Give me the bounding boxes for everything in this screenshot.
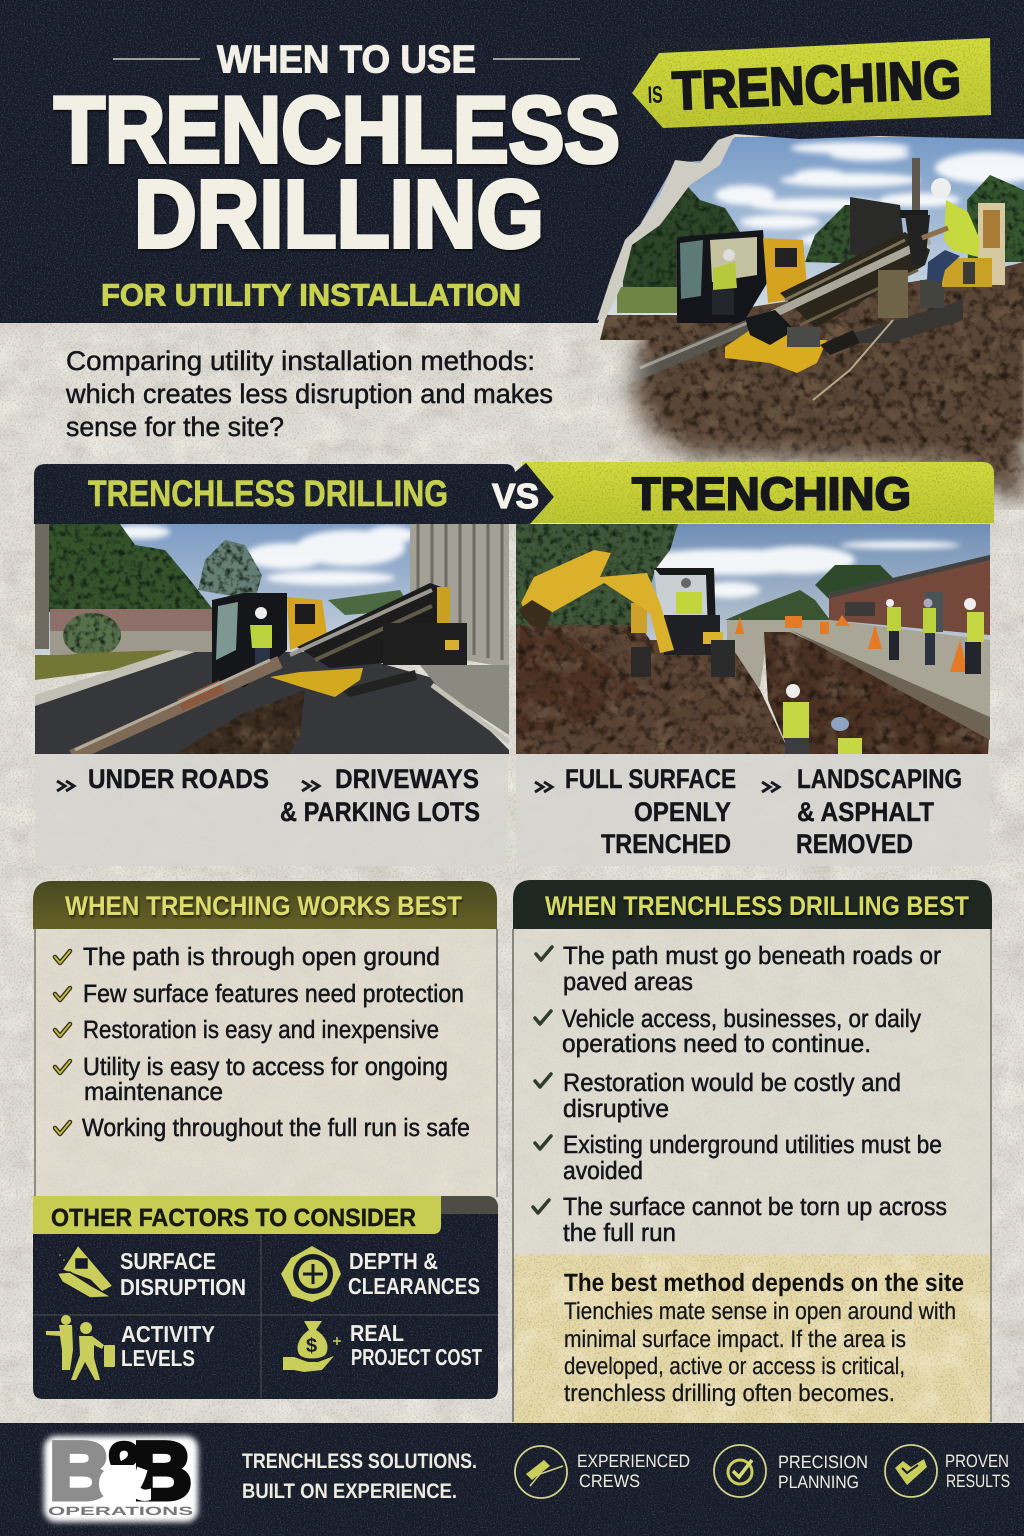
panel: other factors to consider: OTHER FACTORS TO CONSIDER: [51, 1204, 416, 1232]
callout: best method: trenchless drilling often becomes.: [564, 1380, 895, 1407]
intro text: sense for the site?: [66, 412, 284, 442]
callout: best method: developed, active or access is critical,: [564, 1353, 905, 1380]
badge: proven results: PROVEN: [945, 1451, 1009, 1471]
rods: [290, 583, 467, 697]
icon: depth and clearances: [281, 1246, 341, 1302]
icon: real project cost: $: [306, 1335, 317, 1357]
intro text: which creates less disruption and makes: [65, 379, 553, 409]
logo: [44, 1426, 198, 1522]
panel: when trenchless drilling best: WHEN TRENCHLESS DRILLING BEST: [545, 891, 969, 921]
panel: other factors to consider: [33, 1196, 498, 1399]
panel: when trenching works best: WHEN TRENCHING WORKS BEST: [65, 891, 462, 921]
cones: [735, 615, 968, 672]
panel: other factors to consider: DEPTH &: [349, 1248, 438, 1274]
comparison banner: VS: [492, 477, 539, 516]
rig rear housing: [850, 197, 905, 255]
excavator: [518, 550, 735, 677]
panel: when trenching works best: Working throughout the full run is safe: [82, 1114, 470, 1142]
yellow drill head: [725, 310, 827, 373]
comparison banner: TRENCHING: [632, 468, 911, 520]
heading tag: [33, 1196, 441, 1234]
panel: when trenching works best: Few surface features need protection: [83, 980, 464, 1008]
panel: when trenchless drilling best: The path must go beneath roads or: [563, 942, 941, 970]
panel: when trenching works best: [33, 881, 497, 1200]
rig cab: [212, 593, 327, 687]
panel: when trenchless drilling best: The surface cannot be torn up across: [563, 1193, 947, 1221]
title block: DRILLING: [134, 161, 544, 268]
panel: when trenchless drilling best: disruptive: [563, 1095, 669, 1123]
panel: when trenchless drilling best: paved areas: [563, 968, 693, 996]
tagline: [242, 1450, 477, 1503]
chevrons: under roads: [57, 781, 319, 791]
title block: WHEN TO USE: [217, 38, 476, 82]
callout: best method: [514, 1254, 990, 1423]
chevrons: full surface: [535, 782, 779, 792]
panel: when trenchless drilling best: avoided: [563, 1157, 643, 1185]
callout: best method: minimal surface impact. If the area is: [564, 1326, 906, 1353]
panel: other factors to consider: LEVELS: [121, 1345, 195, 1371]
panel: when trenching works best: maintenance: [84, 1078, 223, 1106]
photo: open trenching: [516, 524, 990, 754]
logo: OPERATIONS: [48, 1504, 193, 1518]
comparison banner: TRENCHLESS DRILLING: [88, 473, 448, 514]
panel: when trenching works best: Utility is easy to access for ongoing: [83, 1053, 448, 1081]
panel: trenching impacts: TRENCHED: [601, 829, 731, 859]
trench patch: [175, 690, 305, 754]
rod bundle: [750, 232, 930, 328]
panel: other factors to consider: DISRUPTION: [120, 1274, 246, 1300]
panel: trenching impacts: & ASPHALT: [797, 797, 934, 827]
title block: [54, 38, 620, 312]
panel: other factors to consider: CLEARANCES: [348, 1273, 480, 1299]
panel: other factors to consider: ACTIVITY: [121, 1321, 215, 1347]
intro text: [65, 346, 553, 442]
panel: other factors to consider: PROJECT COST: [351, 1344, 482, 1370]
pipe: [72, 662, 280, 756]
checkmarks: [55, 951, 70, 1134]
panel: trenchless uses: DRIVEWAYS: [335, 764, 479, 794]
badge: precision planning: PRECISION: [778, 1452, 868, 1472]
title block: FOR UTILITY INSTALLATION: [101, 278, 521, 312]
panel: trenching impacts: OPENLY: [634, 797, 731, 827]
intro text: Comparing utility installation methods:: [66, 346, 535, 376]
badge: experienced crews: EXPERIENCED: [577, 1451, 690, 1471]
panel: when trenchless drilling best: operations need to continue.: [562, 1030, 871, 1058]
footer band: [0, 1423, 1024, 1536]
tagline: BUILT ON EXPERIENCE.: [242, 1480, 457, 1503]
panel: when trenchless drilling best: Vehicle access, businesses, or daily: [562, 1005, 921, 1033]
heading: when trenching works best: [33, 881, 497, 929]
panel: trenching impacts: LANDSCAPING: [797, 764, 962, 794]
photo: trenchless drilling under road: [35, 524, 509, 756]
rig cab: [677, 230, 808, 323]
tracks: [853, 300, 963, 343]
panel: when trenchless drilling best: the full run: [563, 1219, 676, 1247]
logo: B: [49, 1426, 111, 1517]
panel: trenching impacts: FULL SURFACE: [565, 764, 736, 794]
callout: best method: Tienchies mate sense in open around with: [564, 1298, 956, 1325]
logo: B: [133, 1426, 192, 1517]
torn paper edge: [597, 134, 735, 320]
icon: real project cost: [283, 1321, 341, 1372]
trench: [764, 632, 990, 754]
panel: trenchless uses: UNDER ROADS: [88, 764, 269, 794]
badge: precision planning: [714, 1445, 868, 1497]
hero photo: drilling rig on site: [590, 130, 1024, 510]
badge: proven results: [885, 1445, 1010, 1497]
title block: TRENCHLESS: [54, 77, 620, 182]
icon: activity levels: [46, 1315, 115, 1380]
tag: is trenching: IS: [647, 81, 663, 109]
drill pipe: [610, 327, 747, 385]
badge: experienced crews: CREWS: [579, 1471, 640, 1491]
dark header background: [0, 0, 1024, 330]
panel: when trenchless drilling best: Restoration would be costly and: [563, 1069, 901, 1097]
comparison banner: [34, 462, 994, 524]
panel: when trenchless drilling best: [513, 880, 992, 1423]
trees behind rig: [623, 187, 740, 287]
panel: trenching impacts: REMOVED: [796, 829, 913, 859]
callout: best method: The best method depends on the site: [564, 1269, 964, 1297]
icon: surface disruption: [57, 1245, 113, 1298]
panel: trenchless uses: [35, 754, 508, 866]
heading: when trenchless drilling best: [513, 880, 992, 929]
panel: trenchless uses: & PARKING LOTS: [280, 797, 480, 827]
crew: [783, 598, 984, 754]
base: [270, 668, 363, 697]
panel: when trenching works best: Restoration is easy and inexpensive: [83, 1016, 439, 1044]
tag: is trenching: TRENCHING: [671, 49, 962, 121]
operator: [900, 178, 1005, 287]
logo: &: [97, 1426, 152, 1517]
panel: when trenchless drilling best: Existing underground utilities must be: [563, 1131, 942, 1159]
badge: precision planning: PLANNING: [778, 1472, 859, 1492]
panel: other factors to consider: REAL: [350, 1320, 404, 1346]
tagline: TRENCHLESS SOLUTIONS.: [242, 1450, 477, 1473]
panel: other factors to consider: SURFACE: [120, 1248, 216, 1274]
panel: when trenching works best: The path is through open ground: [83, 943, 440, 971]
badge: experienced crews: [515, 1446, 690, 1498]
panel: trenching impacts: [516, 754, 990, 866]
checkmarks: [533, 947, 552, 1213]
